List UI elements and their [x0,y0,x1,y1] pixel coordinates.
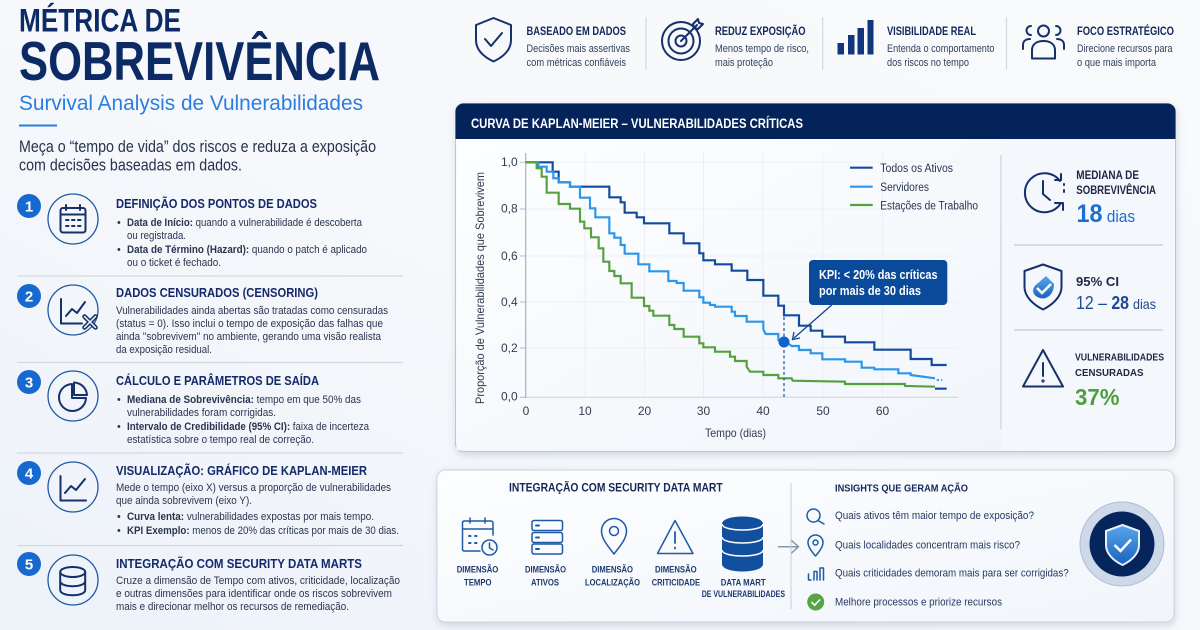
curve: servidores [526,162,942,380]
dimension: localização [585,518,640,589]
x axis tick labels: 30 [697,404,710,418]
number badge 1 [17,194,41,218]
icon: clock [1025,173,1064,212]
bullet list: • [117,421,121,433]
bullet list: estatística sobre o tempo real de correção. [127,434,314,446]
benefit: reduz exposição: Menos tempo de risco, [715,43,809,55]
KPI: mediana: SOBREVIVÊNCIA [1076,184,1156,197]
x axis tick labels: 50 [816,404,830,418]
title [19,3,380,92]
icon: shield badge [1024,264,1062,310]
step 4: visualização [17,461,399,537]
KPI: mediana: MEDIANA DE [1076,170,1139,182]
x axis tick labels: 60 [876,404,889,418]
KPI callout: por mais de 30 dias [819,284,921,298]
paragraph: ainda "sobrevivem" no ambiente, gerando uma visão realista [116,331,381,343]
bullet list: • [117,394,121,406]
benefit: baseado em dados [476,18,630,69]
x axis tick labels: 20 [638,404,651,418]
icon: line chart [48,462,98,512]
number badge 5 [17,552,41,576]
dimension: localização: DIMENSÃO [592,565,633,576]
panel: Kaplan-Meier chart [456,104,1176,452]
heading: VISUALIZAÇÃO: GRÁFICO DE KAPLAN-MEIER [116,463,368,478]
number badge 3: 3 [25,374,33,392]
heading: DADOS CENSURADOS (CENSORING) [116,285,318,300]
paragraph and bullets: Mede o tempo (eixo X) versus a proporção de vulnerabilidades [116,482,391,494]
icon: shield check [476,18,511,62]
KPI callout [809,260,947,305]
benefit: foco estratégico: Direcione recursos para [1077,43,1173,55]
insight: melhore processos [807,594,1003,610]
arrow: callout to marker [792,305,832,340]
bullet list: ou registrada. [127,230,186,242]
benefit: foco estratégico: o que mais importa [1077,57,1157,69]
number badge 4 [17,461,41,485]
dimension: ativos: ATIVOS [531,578,559,589]
number badge 5: 5 [25,556,33,574]
heading: INTEGRAÇÃO COM SECURITY DATA MARTS [116,556,362,571]
benefit: baseado em dados: BASEADO EM DADOS [526,24,626,38]
benefit: foco estratégico [1023,23,1174,69]
paragraph and bullets: KPI Exemplo: menos de 20% das críticas por mais de 30 dias. [127,525,399,537]
paragraph: e outras dimensões para identificar onde os riscos sobrevivem [116,588,392,600]
x axis title: Tempo (dias) [705,426,766,440]
heading: DEFINIÇÃO DOS PONTOS DE DADOS [116,196,317,211]
intro text: com decisões baseadas em dados. [19,156,242,174]
paragraph and bullets [116,482,399,537]
KPI callout: KPI: < 20% das críticas [819,268,938,282]
paragraph: mais e direcionar melhor os recursos de remediação. [116,601,349,613]
paragraph: (status = 0). Isso inclui o tempo de exposição das falhas que [116,318,383,330]
bullet list: Data de Término (Hazard): quando o patch é aplicado [127,244,367,256]
icon: chart with x [48,285,98,335]
KPI: mediana: 18 [1076,200,1103,228]
y axis tick labels: 0,2 [501,341,518,355]
number badge 3 [17,370,41,394]
KPI: censuradas: CENSURADAS [1075,367,1144,379]
benefit: baseado em dados: Decisões mais assertivas [526,43,630,55]
y axis tick labels: 0,4 [501,295,518,309]
number badge 4: 4 [25,466,34,482]
paragraph: da exposição residual. [116,344,212,356]
benefit: reduz exposição: mais proteção [715,57,773,69]
legend: Servidores [880,182,929,194]
step 3: cálculo e parâmetros [17,370,369,446]
x axis tick labels: 0 [523,404,530,418]
KPI: 95% CI: dias [1133,296,1156,312]
insight: melhore processos: Melhore processos e priorize recursos [835,597,1003,609]
benefit: visibilidade real: dos riscos no tempo [887,57,969,69]
y axis title: Proporção de Vulnerabilidades que Sobrevivem [473,172,487,404]
dimension: tempo: DIMENSÃO [457,565,498,576]
panel header: CURVA DE KAPLAN-MEIER – VULNERABILIDADES CRÍTICAS [471,116,803,131]
icon: warning triangle [1023,350,1063,386]
benefit: reduz exposição [662,19,809,69]
number badge 1: 1 [25,198,33,216]
heading: CÁLCULO E PARÂMETROS DE SAÍDA [116,373,320,388]
dimension: criticidade: DIMENSÃO [655,565,697,576]
paragraph and bullets: • [117,525,121,537]
KPI: 95% CI [1024,264,1156,313]
bullet list: vulnerabilidades foram corrigidas. [127,407,276,419]
icon: database [48,555,98,605]
intro text [19,138,376,174]
y axis tick labels: 1,0 [501,155,518,169]
step 5: integração [17,552,400,613]
arrow [778,540,798,554]
insight: ativos: Quais ativos têm maior tempo de exposição? [835,510,1034,522]
icon: target [662,19,703,60]
heading: insights: INSIGHTS QUE GERAM AÇÃO [835,482,968,495]
bullet list [117,217,367,269]
intro text: Meça o “tempo de vida” dos riscos e reduza a exposição [19,138,376,156]
data mart: DATA MART [721,578,766,589]
legend: Estações de Trabalho [880,200,978,212]
dimension: criticidade: CRITICIDADE [652,578,700,589]
legend [850,163,978,212]
data mart [702,516,785,600]
icon: pie chart [48,371,98,421]
bullet list: Mediana de Sobrevivência: tempo em que 50% das [127,394,361,406]
insight: localidades: Quais localidades concentram mais risco? [835,539,1020,551]
insight: ativos [807,509,1034,524]
subtitle: Survival Analysis de Vulnerabilidades [19,92,363,115]
bullet list: • [117,244,121,256]
dimension: tempo: TEMPO [464,578,492,589]
paragraph: Cruze a dimensão de Tempo com ativos, criticidade, localização [116,575,400,587]
top benefits strip [476,17,1174,70]
paragraph [116,575,400,613]
KPI: mediana: dias [1107,208,1135,226]
dimension: tempo [457,518,498,589]
benefit: foco estratégico: FOCO ESTRATÉGICO [1077,23,1174,38]
y axis tick labels: 0,0 [501,390,518,404]
number badge 2 [17,284,41,308]
x axis tick labels [523,404,889,418]
benefit: reduz exposição: REDUZ EXPOSIÇÃO [715,23,806,38]
paragraph and bullets: Curva lenta: vulnerabilidades expostas por mais tempo. [127,511,374,523]
dimension: ativos: DIMENSÃO [525,565,566,576]
panel header [456,104,1176,139]
paragraph and bullets: • [117,511,121,523]
KPI: 95% CI: 12 – 28 [1076,293,1129,313]
benefit: visibilidade real: VISIBILIDADE REAL [887,24,976,38]
curve: estações de trabalho [526,162,947,389]
paragraph: Vulnerabilidades ainda abertas são tratadas como censuradas [116,305,388,317]
KPI: mediana [1025,170,1156,228]
bullet list: ou o ticket é fechado. [127,257,221,269]
x axis tick labels: 40 [756,404,770,418]
curve: todos os ativos [526,162,947,365]
y axis tick labels [501,155,518,404]
legend: Todos os Ativos [880,163,953,175]
bullet list: Intervalo de Credibilidade (95% CI): faixa de incerteza [127,421,369,433]
benefit: baseado em dados: com métricas confiáveis [526,57,626,69]
icon: people [1023,26,1064,58]
x axis tick labels: 10 [578,404,592,418]
icon: shield badge [1080,502,1164,586]
KPI marker [778,317,790,397]
insight: criticidades: Quais criticidades demoram mais para ser corrigidas? [835,568,1069,580]
insight: localidades [808,535,1020,556]
data mart: DE VULNERABILIDADES [702,589,785,600]
step 2: dados censurados [17,284,388,356]
y axis tick labels: 0,8 [501,202,518,216]
bullet list [117,394,369,446]
bullet list: Data de Início: quando a vulnerabilidade é descoberta [127,217,362,229]
dimension: ativos [525,520,566,589]
dimension: localização: LOCALIZAÇÃO [585,578,640,589]
KPI: censuradas [1023,350,1164,410]
paragraph and bullets: que ainda sobrevivem (eixo Y). [116,495,252,507]
survival chart [473,153,978,440]
panel: integração e insights [437,470,1174,622]
title: MÉTRICA DE [19,3,181,39]
benefit: visibilidade real [838,20,994,69]
title: SOBREVIVÊNCIA [19,31,380,92]
KPI: censuradas: 37% [1075,384,1120,410]
paragraph [116,305,388,356]
heading: integração: INTEGRAÇÃO COM SECURITY DATA MART [509,480,723,495]
bullet list: • [117,217,121,229]
icon: calendar [48,194,98,244]
y axis tick labels: 0,6 [501,249,518,263]
KPI: 95% CI: 95% CI [1076,274,1119,289]
dimension: criticidade [652,520,700,589]
benefit: visibilidade real: Entenda o comportamento [887,43,994,55]
number badge 2: 2 [25,288,33,306]
icon: bars [838,20,874,54]
step 1: definição dos pontos de dados [17,194,367,269]
KPI: censuradas: VULNERABILIDADES [1075,352,1164,364]
